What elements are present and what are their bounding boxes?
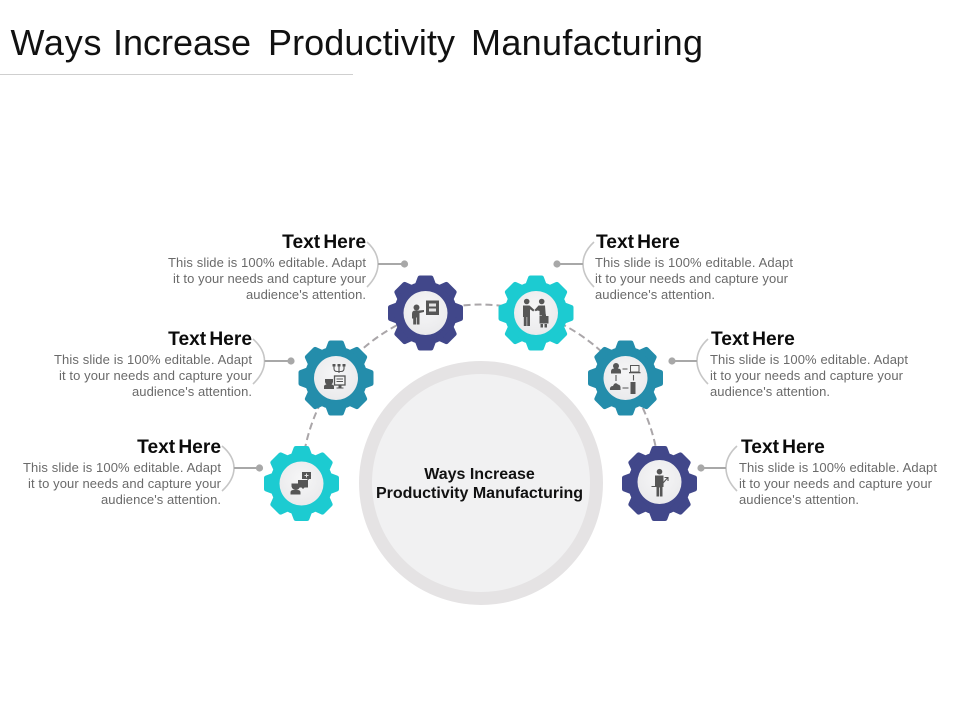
gear 2: presenter with monitor and tree bbox=[301, 343, 371, 413]
callout: middle right bbox=[668, 329, 908, 399]
callout: top left: Text Here bbox=[282, 232, 366, 253]
callout: middle right: audience's attention. bbox=[710, 384, 830, 399]
callout: middle right: it to your needs and capture your bbox=[710, 368, 904, 383]
callout: middle left: Text Here bbox=[168, 329, 252, 350]
callout: middle left bbox=[54, 329, 295, 399]
callout: top right: it to your needs and capture your bbox=[595, 271, 789, 286]
gear 1: speech bubbles bbox=[266, 448, 336, 518]
callout: middle left: This slide is 100% editable. Adapt bbox=[54, 352, 252, 367]
dashed connector arc bbox=[302, 305, 660, 484]
callout: bottom right bbox=[697, 437, 937, 507]
callout: top left: This slide is 100% editable. Adapt bbox=[168, 255, 366, 270]
callout: bottom left: Text Here bbox=[137, 437, 221, 458]
central circle: Ways Increase bbox=[424, 466, 535, 483]
gear 3: presenter at board bbox=[390, 278, 460, 348]
callout: bottom left: This slide is 100% editable. Adapt bbox=[23, 460, 221, 475]
callout: top left: audience's attention. bbox=[246, 287, 366, 302]
callout: bottom right: This slide is 100% editable. Adapt bbox=[739, 460, 937, 475]
title bbox=[10, 22, 703, 63]
callout: bottom right: audience's attention. bbox=[739, 492, 859, 507]
callout: middle left: it to your needs and capture your bbox=[59, 368, 253, 383]
title: Manufacturing bbox=[471, 22, 703, 63]
gear 5: connected devices bbox=[590, 343, 660, 413]
title: Ways bbox=[10, 22, 102, 63]
central circle bbox=[366, 368, 596, 598]
title: Increase bbox=[113, 22, 251, 63]
callout: bottom left: audience's attention. bbox=[101, 492, 221, 507]
callout: bottom right: Text Here bbox=[741, 437, 825, 458]
callout: middle left: audience's attention. bbox=[132, 384, 252, 399]
callout: middle right: This slide is 100% editable. Adapt bbox=[710, 352, 908, 367]
callout: top right: audience's attention. bbox=[595, 287, 715, 302]
callout: top right: Text Here bbox=[596, 232, 680, 253]
central circle: Productivity Manufacturing bbox=[376, 485, 583, 502]
gear 6: person with arrow bbox=[624, 448, 694, 518]
callout: bottom right: it to your needs and capture your bbox=[739, 476, 933, 491]
callout: top right bbox=[553, 232, 793, 302]
callout: top right: This slide is 100% editable. Adapt bbox=[595, 255, 793, 270]
callout: top left bbox=[168, 232, 408, 302]
callout: top left: it to your needs and capture your bbox=[173, 271, 367, 286]
title: Productivity bbox=[268, 22, 455, 63]
callout: middle right: Text Here bbox=[711, 329, 795, 350]
callout: bottom left: it to your needs and capture your bbox=[28, 476, 222, 491]
gear 4: handshake bbox=[501, 278, 571, 348]
callout: bottom left bbox=[23, 437, 263, 507]
